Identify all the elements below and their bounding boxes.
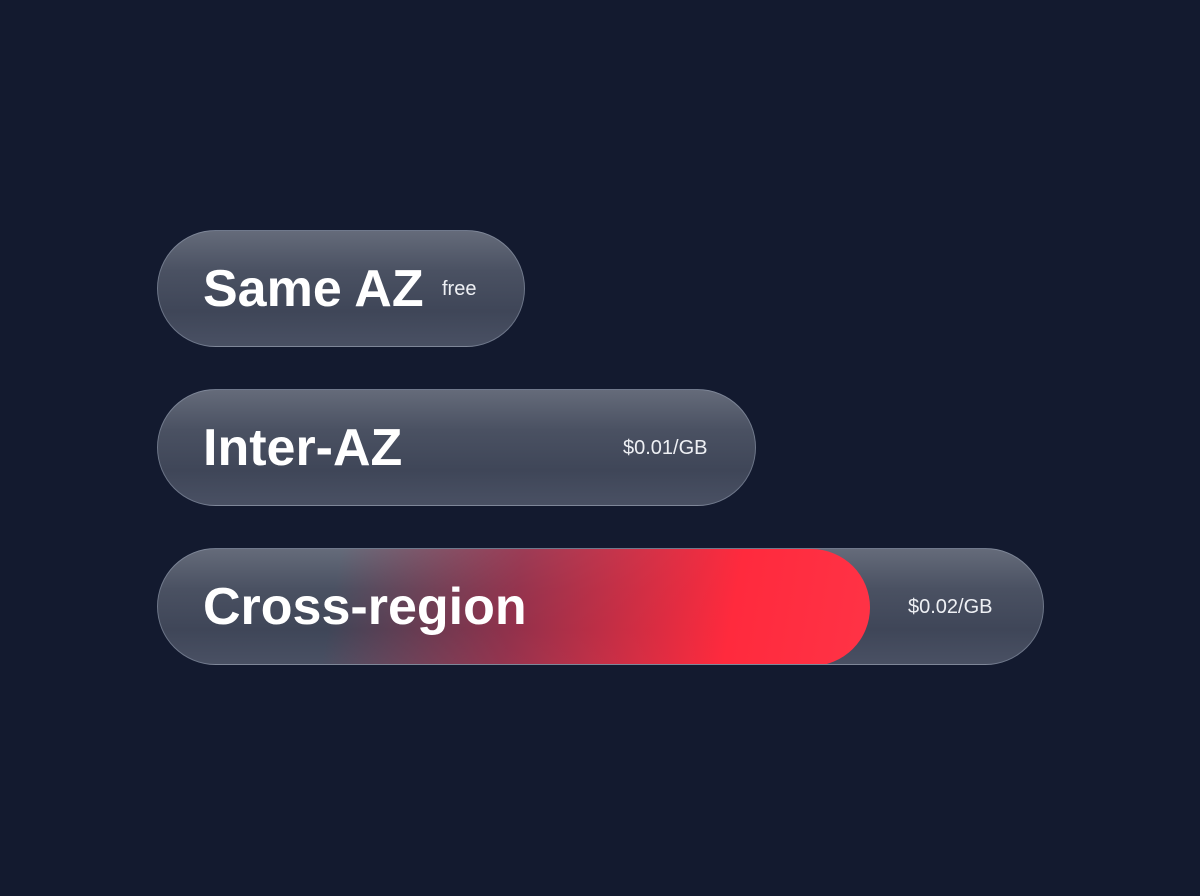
value: $0.02/GB: $0.02/GB — [908, 596, 993, 618]
bar: Inter-AZ — [157, 389, 756, 506]
label: Cross-region: Cross-region — [203, 578, 527, 636]
red cost fill — [158, 549, 870, 666]
bar: Cross-region — [157, 548, 1044, 665]
bar: Same AZ — [157, 230, 525, 347]
label: Same AZ: Same AZ — [203, 260, 424, 318]
value: $0.01/GB: $0.01/GB — [623, 437, 708, 459]
label: Inter-AZ: Inter-AZ — [203, 419, 402, 477]
value: free: free — [442, 278, 476, 300]
